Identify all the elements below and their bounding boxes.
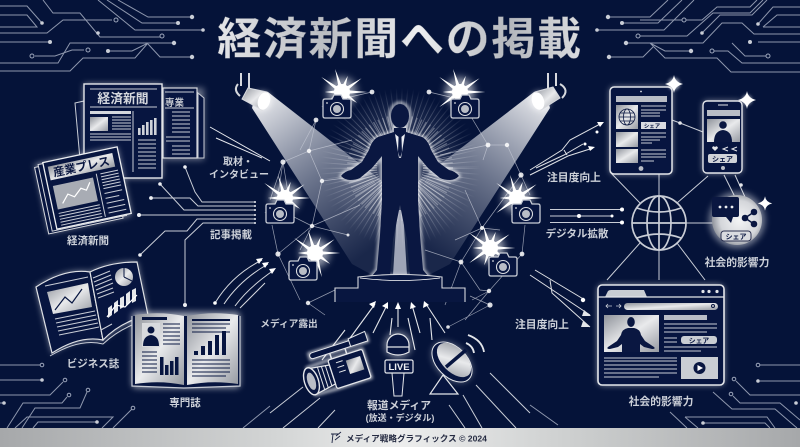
- tablet: [610, 87, 672, 174]
- lines: デジタル拡散: [550, 208, 624, 224]
- label: メディア露出: メディア露出: [260, 317, 318, 330]
- constellation network: [270, 90, 530, 329]
- label: 取材・インタビュー: 取材・: [223, 155, 253, 168]
- right newspaper: 専業: 専業: [165, 97, 185, 109]
- title: 経済新聞への掲載: [217, 15, 583, 64]
- label: 記事掲載: 記事掲載: [210, 228, 252, 241]
- arrows: 注目度向上 upper: [530, 122, 604, 175]
- シェア pill: [721, 231, 751, 241]
- label: 放送・デジタル: (放送・デジタル): [366, 412, 434, 423]
- camera flash 6: [469, 225, 517, 276]
- circuit pattern: top right: [595, 0, 800, 72]
- right newspaper: 専業: [163, 88, 204, 160]
- browser window: [598, 285, 724, 385]
- back pages of main paper: [75, 101, 90, 182]
- label: 注目度向上 lower: 注目度向上: [515, 317, 569, 331]
- circuit pattern: bottom right: [530, 363, 800, 428]
- sparkle on tablet: [665, 75, 683, 93]
- tablet: シェア: [644, 123, 661, 130]
- microphone: [384, 331, 413, 396]
- smartphone: [703, 101, 742, 173]
- hub spokes: [607, 120, 745, 280]
- spotlight lamp: right: [530, 73, 566, 111]
- circuit pattern: bottom left: [0, 363, 270, 428]
- browser window: シェア: [689, 337, 709, 345]
- satellite dish: [424, 334, 484, 394]
- social influence circle: シェア: [726, 233, 746, 241]
- spotlight beam: right: [400, 92, 550, 290]
- sparkle near social circle: [758, 196, 772, 211]
- globe: [632, 196, 686, 250]
- connector dots: [678, 121, 743, 187]
- label: ビジネス誌: ビジネス誌: [67, 357, 120, 370]
- smartphone: シェア: [712, 156, 733, 164]
- circuit bus to 記事掲載: [137, 165, 256, 307]
- arrows into podium: [322, 301, 445, 360]
- trade press: 産業プレス: 産業プレス: [52, 154, 111, 180]
- social influence circle: [709, 192, 765, 248]
- arrows toward メディア露出: [213, 258, 276, 308]
- trade press: 産業プレス: [34, 147, 132, 234]
- streak: toward interview: [210, 127, 270, 161]
- circuit pattern: top left: [0, 0, 205, 71]
- camera flash 5: [496, 175, 542, 223]
- person silhouette: [341, 103, 459, 276]
- business magazine: [36, 262, 150, 356]
- label: 注目度向上 upper: 注目度向上: [547, 170, 601, 184]
- spotlight lamp: left: [236, 73, 272, 111]
- newspaper group: [34, 84, 204, 234]
- light rays behind person: [330, 92, 470, 248]
- label: 専門誌: 専門誌: [169, 396, 201, 409]
- arrows: 注目度向上 lower: [530, 270, 591, 327]
- camera flash 3: [264, 175, 310, 223]
- camera flash 2: [439, 69, 485, 118]
- microphone: LIVE: [388, 362, 410, 373]
- label: 経済新聞: 経済新聞: [67, 234, 109, 247]
- streaks bottom left and right: [270, 373, 530, 428]
- main newspaper: 経済新聞: 経済新聞: [97, 91, 149, 106]
- label: デジタル拡散: デジタル拡散: [546, 227, 609, 240]
- footer icon: [331, 432, 341, 443]
- video camera: [295, 331, 379, 398]
- specialty magazine: [132, 312, 240, 388]
- camera flash 1: [321, 69, 367, 118]
- footer bar: [0, 428, 800, 447]
- camera flash 4: [289, 230, 340, 280]
- main newspaper: 経済新聞: [84, 84, 162, 178]
- footer text: メディア戦略グラフィックス © 2024: [346, 432, 487, 444]
- chat bubble icon: [712, 197, 739, 223]
- share icon: [742, 209, 757, 227]
- sparkle on smartphone: [738, 91, 756, 109]
- label: 報道メディア: 報道メディア: [367, 398, 431, 412]
- label: 社会的影響力 lower: 社会的影響力: [629, 394, 693, 408]
- label: 社会的影響力 upper: 社会的影響力: [705, 255, 769, 269]
- spotlight beam: left: [252, 92, 400, 290]
- chat dots: [719, 206, 733, 208]
- label: 取材・インタビュー: インタビュー: [209, 168, 269, 181]
- podium: [335, 274, 465, 302]
- label: 取材・インタビュー: [209, 155, 269, 181]
